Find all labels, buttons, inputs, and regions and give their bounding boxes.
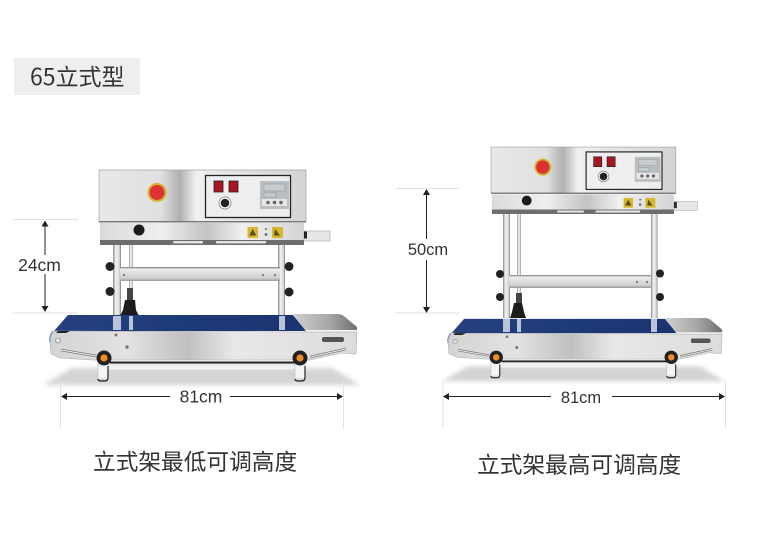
dimension: 24cm height: 24cm [18, 255, 61, 275]
sealing head with control panel [491, 147, 697, 214]
conveyor base with belt and feet [43, 314, 360, 385]
dimension: 81cm width, left: 81cm [180, 386, 222, 406]
machine: lowest stand height [43, 170, 360, 385]
post reflections on the belt [113, 316, 285, 330]
heading background: 65立式型: 65立式型 [30, 58, 125, 92]
machine: highest stand height [442, 147, 725, 381]
post reflections on the belt [503, 319, 657, 332]
stand posts and crossbar, low position [106, 245, 294, 316]
dimension: 50cm height: 50cm [408, 241, 448, 259]
dimension: 81cm width, left [60, 380, 344, 428]
conveyor base with belt and feet [442, 318, 725, 381]
dimension: 50cm height [395, 188, 459, 313]
caption: lowest adjustable height: 立式架最低可调高度 [93, 444, 297, 477]
dimension: 24cm height [13, 220, 78, 313]
stand posts and crossbar, high position [496, 214, 664, 318]
heading background: 65立式型 [14, 58, 140, 95]
dimension: 81cm width, right [443, 381, 726, 428]
caption: highest adjustable height: 立式架最高可调高度 [477, 447, 681, 480]
sealing head with control panel [99, 170, 330, 245]
dimension: 81cm width, right: 81cm [561, 389, 601, 407]
